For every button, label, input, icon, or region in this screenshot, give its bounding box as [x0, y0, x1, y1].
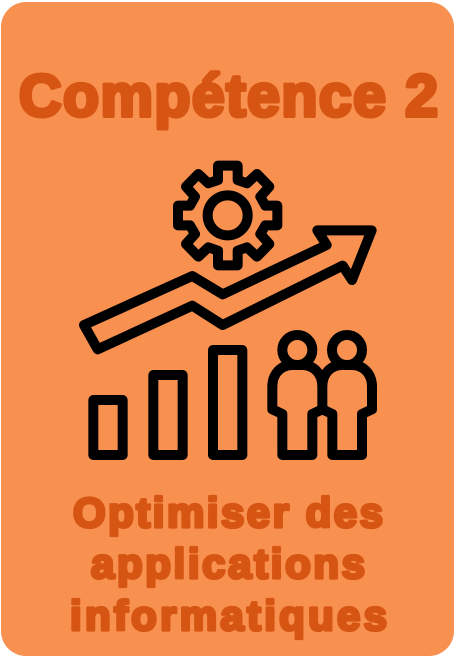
subtitle: Optimiser des applications informatiques [70, 489, 387, 639]
subtitle line 2: applications [91, 540, 365, 587]
icon: rising arrow [84, 230, 372, 349]
icon: growth, gear, bars and people [84, 166, 372, 455]
title: Compétence 2 [19, 63, 438, 129]
icon: two people [272, 335, 372, 455]
bar chart icon [93, 350, 242, 455]
icon: gear [178, 166, 277, 265]
subtitle line 1: Optimiser des [73, 489, 383, 536]
subtitle line 3: informatiques [70, 592, 387, 639]
